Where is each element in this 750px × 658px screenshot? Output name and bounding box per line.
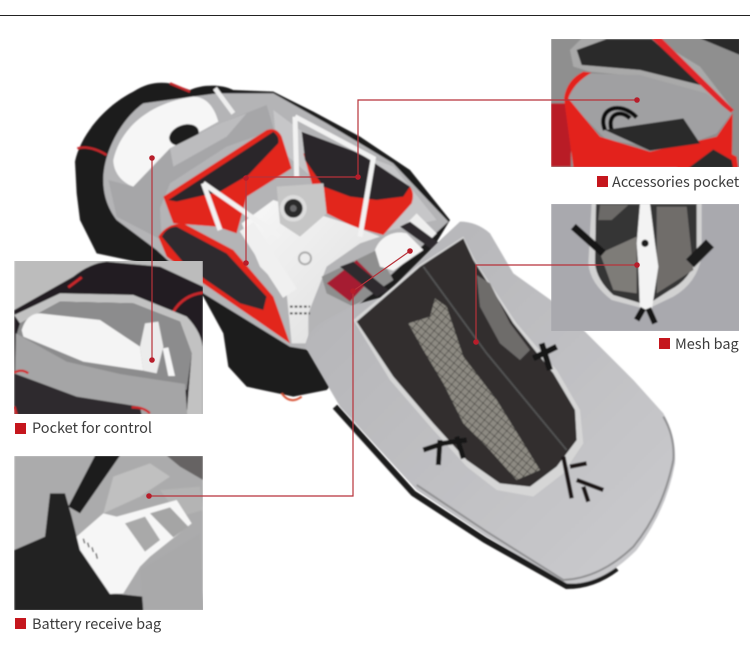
line: battery bag bbox=[149, 251, 410, 496]
mesh pile bbox=[14, 493, 143, 611]
backpack main photo bbox=[75, 83, 675, 586]
flap bbox=[570, 38, 733, 110]
callout lines bbox=[149, 100, 637, 496]
label: pocket for control: Pocket for control bbox=[32, 417, 152, 438]
top right dark bbox=[700, 38, 740, 55]
mesh seam bbox=[423, 267, 567, 450]
controller bbox=[113, 97, 218, 187]
buckle left bbox=[423, 437, 467, 465]
back wall bbox=[273, 110, 437, 233]
battery label right bbox=[150, 507, 188, 537]
open lid bbox=[305, 222, 675, 586]
lid stitched rim bbox=[417, 417, 674, 580]
mesh panel right bbox=[477, 275, 530, 360]
control pocket close-up bbox=[14, 260, 203, 415]
inset: mesh bag bbox=[551, 204, 739, 331]
inner lining rim bbox=[14, 293, 203, 415]
lid black edge bbox=[335, 407, 617, 586]
inner lining bbox=[16, 302, 192, 390]
inset: battery receive bag bbox=[14, 456, 203, 610]
propeller bbox=[637, 204, 658, 311]
line: control pocket bbox=[151, 158, 153, 360]
mesh bbox=[595, 204, 697, 305]
battery close-up bbox=[14, 456, 204, 611]
mesh lighter left bbox=[600, 237, 637, 293]
inset: pocket for control bbox=[14, 261, 203, 414]
motor hub bbox=[299, 252, 311, 264]
bottom buckle bbox=[637, 308, 655, 323]
red battery bbox=[327, 260, 373, 302]
mesh rim bbox=[353, 237, 583, 497]
padded right bbox=[160, 487, 203, 517]
mesh lighter top left bbox=[598, 205, 628, 220]
buckle right bbox=[533, 343, 557, 370]
bag shell bbox=[14, 262, 203, 415]
strap lower bbox=[340, 262, 388, 297]
battery bbox=[77, 500, 192, 594]
lining bbox=[103, 93, 448, 350]
antenna bbox=[215, 88, 233, 113]
label: mesh bag: Mesh bag bbox=[675, 333, 739, 354]
left arm bbox=[247, 227, 290, 293]
controller bbox=[22, 313, 143, 371]
mesh bag bbox=[357, 238, 577, 487]
red left edge bbox=[551, 103, 571, 167]
lower dark panel bbox=[14, 373, 142, 415]
camera bbox=[280, 195, 307, 222]
drone body bbox=[242, 200, 380, 343]
strap bbox=[68, 456, 120, 513]
line: accessories pocket bbox=[246, 100, 637, 263]
charger bbox=[605, 118, 700, 151]
lower right padding bbox=[140, 533, 204, 611]
upper left pouch top bbox=[168, 132, 279, 202]
cable bbox=[603, 108, 637, 130]
red trim bbox=[68, 277, 203, 312]
lid surface bbox=[305, 222, 675, 584]
dark top right bbox=[167, 456, 203, 480]
control pocket bbox=[108, 105, 274, 240]
leg vents bbox=[290, 307, 310, 313]
line: mesh bag bbox=[476, 265, 637, 342]
battery lights bbox=[83, 539, 97, 559]
accessories close-up bbox=[551, 38, 741, 168]
label: battery receive bag: Battery receive bag bbox=[32, 613, 161, 634]
white case bbox=[375, 232, 423, 271]
top rule bbox=[0, 15, 750, 16]
battery label left bbox=[125, 517, 160, 552]
antenna bbox=[163, 347, 175, 376]
battery well bbox=[322, 250, 393, 307]
upper right pouch bbox=[303, 153, 413, 235]
strap upper bbox=[400, 222, 442, 252]
zip tag bbox=[282, 393, 302, 400]
inner pocket bbox=[567, 73, 732, 150]
bottom right pouch bbox=[677, 145, 738, 168]
propeller hub bbox=[641, 240, 649, 247]
backpack upper compartment bbox=[75, 83, 450, 400]
gimbal bbox=[277, 183, 327, 237]
controller stick bbox=[140, 322, 163, 373]
lower pouch bbox=[158, 223, 290, 343]
pouch highlight bbox=[170, 113, 247, 167]
bottom right pouch top bbox=[688, 149, 733, 168]
controller lens bbox=[166, 120, 202, 150]
landing gear bbox=[203, 117, 373, 237]
mesh panel bbox=[408, 298, 540, 480]
flap dark inside bbox=[577, 39, 707, 87]
mesh panel grid bbox=[408, 298, 540, 480]
front pocket bbox=[14, 333, 187, 415]
red piping bbox=[77, 83, 190, 155]
lower pouch top bbox=[162, 227, 267, 310]
zip rim bbox=[588, 203, 702, 309]
callout dots bbox=[146, 97, 640, 499]
lower red trim bbox=[14, 371, 150, 415]
red front bbox=[564, 72, 733, 167]
inset: accessories pocket bbox=[551, 39, 739, 167]
padded bag bbox=[103, 463, 170, 513]
mesh lighter right bbox=[657, 207, 693, 293]
right buckle bbox=[690, 243, 710, 263]
buckle bottom bbox=[563, 457, 603, 502]
mesh bag close-up bbox=[551, 203, 741, 332]
backpack body bbox=[75, 83, 450, 397]
label: accessories pocket: Accessories pocket bbox=[612, 171, 740, 192]
upper left pouch bbox=[163, 129, 292, 233]
case top bbox=[407, 213, 437, 243]
red band bbox=[652, 38, 734, 113]
left buckle bbox=[573, 227, 603, 253]
upper right pouch top bbox=[302, 132, 410, 200]
